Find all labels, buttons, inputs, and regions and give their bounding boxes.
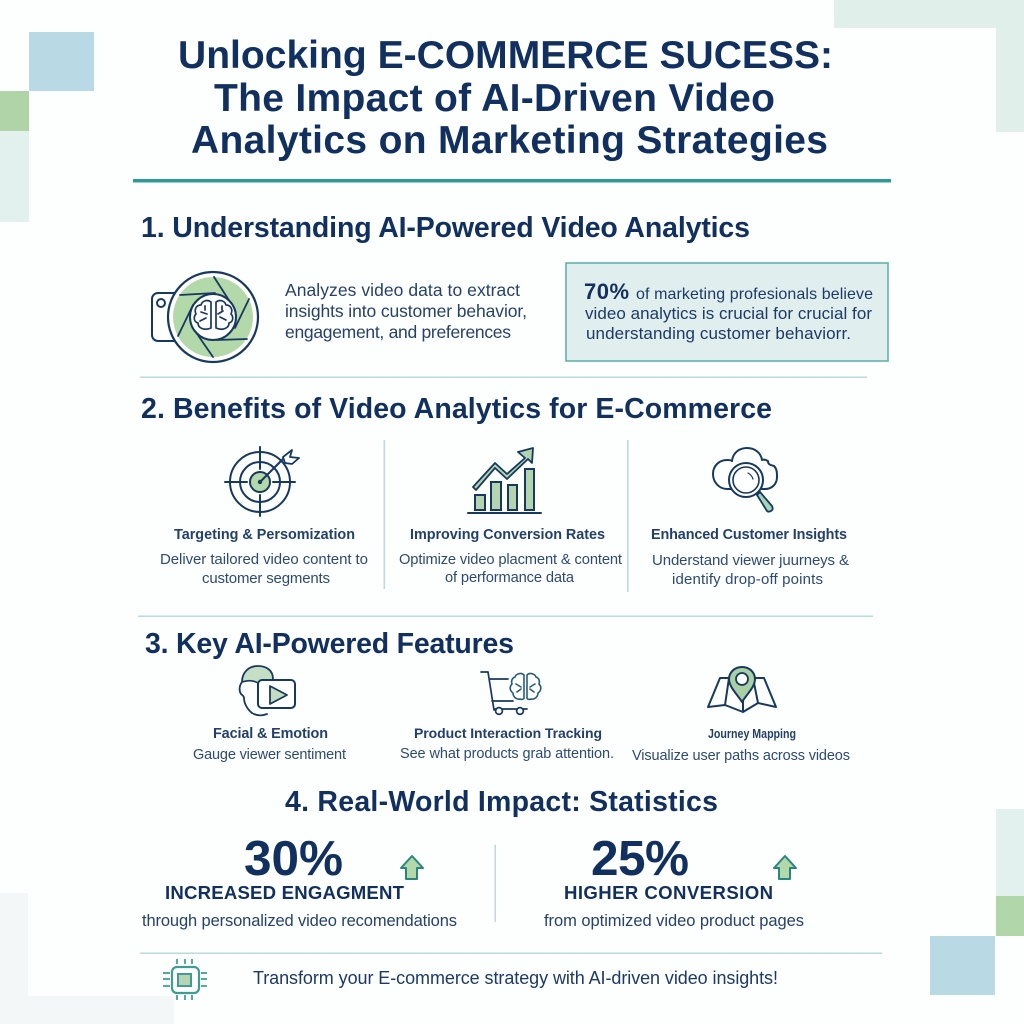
stat: 30% engagement: 30% — [244, 831, 343, 886]
text: conversion benefit — [399, 527, 622, 586]
icon: AI chip — [163, 959, 207, 1000]
callout: 70% statistic: understanding customer behaviorr. — [586, 324, 851, 343]
text: journey feature — [632, 726, 850, 764]
text: targeting benefit: customer segments — [202, 570, 330, 587]
text: insights benefit: Understand viewer juurneys & — [652, 552, 849, 569]
stat: 25% conversion: 25% — [591, 831, 689, 886]
stat: 30% engagement — [142, 831, 457, 930]
heading: section 2: 2. Benefits of Video Analytics for E-Commerce — [141, 393, 772, 425]
text: insights benefit: identify drop-off points — [672, 571, 823, 588]
text: targeting benefit — [160, 527, 368, 587]
text: journey feature: Visualize user paths across videos — [632, 748, 850, 764]
text: journey feature: Journey Mapping — [708, 726, 796, 741]
heading: section 1: 1. Understanding AI-Powered Video Analytics — [141, 212, 750, 244]
stat: 25% conversion — [544, 831, 804, 930]
decorative corner blocks: top left — [0, 32, 94, 222]
text: facial feature: Gauge viewer sentiment — [193, 747, 346, 763]
text: facial feature — [193, 726, 346, 763]
icon: shopping cart with brain — [481, 672, 541, 714]
text: definition: engagement, and preferences — [285, 322, 511, 342]
heading: section 3: 3. Key AI-Powered Features — [145, 628, 514, 660]
icon: map with location pin — [708, 667, 776, 712]
text: targeting benefit: Targeting & Persomization — [174, 527, 355, 543]
text: targeting benefit: Deliver tailored video content to — [160, 551, 368, 568]
footer call to action: Transform your E-commerce strategy with AI-driven video insights! — [253, 968, 778, 988]
text: conversion benefit: Optimize video placment & content — [399, 552, 622, 568]
text: definition — [285, 280, 527, 342]
callout: 70% statistic: of marketing profesionals believe — [636, 286, 873, 303]
text: facial feature: Facial & Emotion — [213, 726, 328, 742]
text: product tracking feature: See what products grab attention. — [400, 746, 614, 762]
text: conversion benefit: Improving Conversion Rates — [410, 527, 605, 543]
text: insights benefit — [651, 527, 849, 588]
icon: up arrow — [774, 856, 796, 879]
decorative corner blocks: bottom right — [930, 809, 1024, 995]
callout: 70% statistic: 70% — [584, 279, 629, 304]
icon: cloud with magnifier — [713, 448, 777, 512]
title — [178, 34, 833, 162]
icon: camera lens with brain — [152, 272, 258, 362]
heading: section 4: 4. Real-World Impact: Statistics — [285, 786, 718, 818]
title: Analytics on Marketing Strategies — [191, 119, 828, 162]
title: Unlocking E-COMMERCE SUCESS: — [178, 34, 833, 77]
text: conversion benefit: of performance data — [445, 570, 575, 586]
callout: 70% statistic — [566, 263, 888, 361]
text: product tracking feature — [400, 725, 614, 762]
decorative corner blocks: bottom left — [0, 893, 174, 1024]
text: product tracking feature: Product Interaction Tracking — [414, 725, 602, 741]
icon: target with arrow — [225, 447, 299, 516]
stat: 25% conversion: HIGHER CONVERSION — [564, 882, 773, 903]
stat: 30% engagement: INCREASED ENGAGMENT — [165, 882, 405, 903]
text: insights benefit: Enhanced Customer Insights — [651, 527, 847, 543]
stat: 25% conversion: from optimized video product pages — [544, 912, 804, 930]
icon: rising bar chart — [468, 448, 541, 513]
stat: 30% engagement: through personalized video recomendations — [142, 912, 457, 930]
text: definition: Analyzes video data to extract — [285, 280, 520, 300]
callout: 70% statistic: video analytics is crucial for crucial for — [585, 304, 872, 323]
title: The Impact of AI-Driven Video — [214, 77, 775, 120]
decorative corner blocks: top right — [834, 0, 1024, 132]
text: definition: insights into customer behavior, — [285, 301, 527, 321]
icon: face with play button — [240, 666, 295, 715]
icon: up arrow — [401, 856, 423, 879]
